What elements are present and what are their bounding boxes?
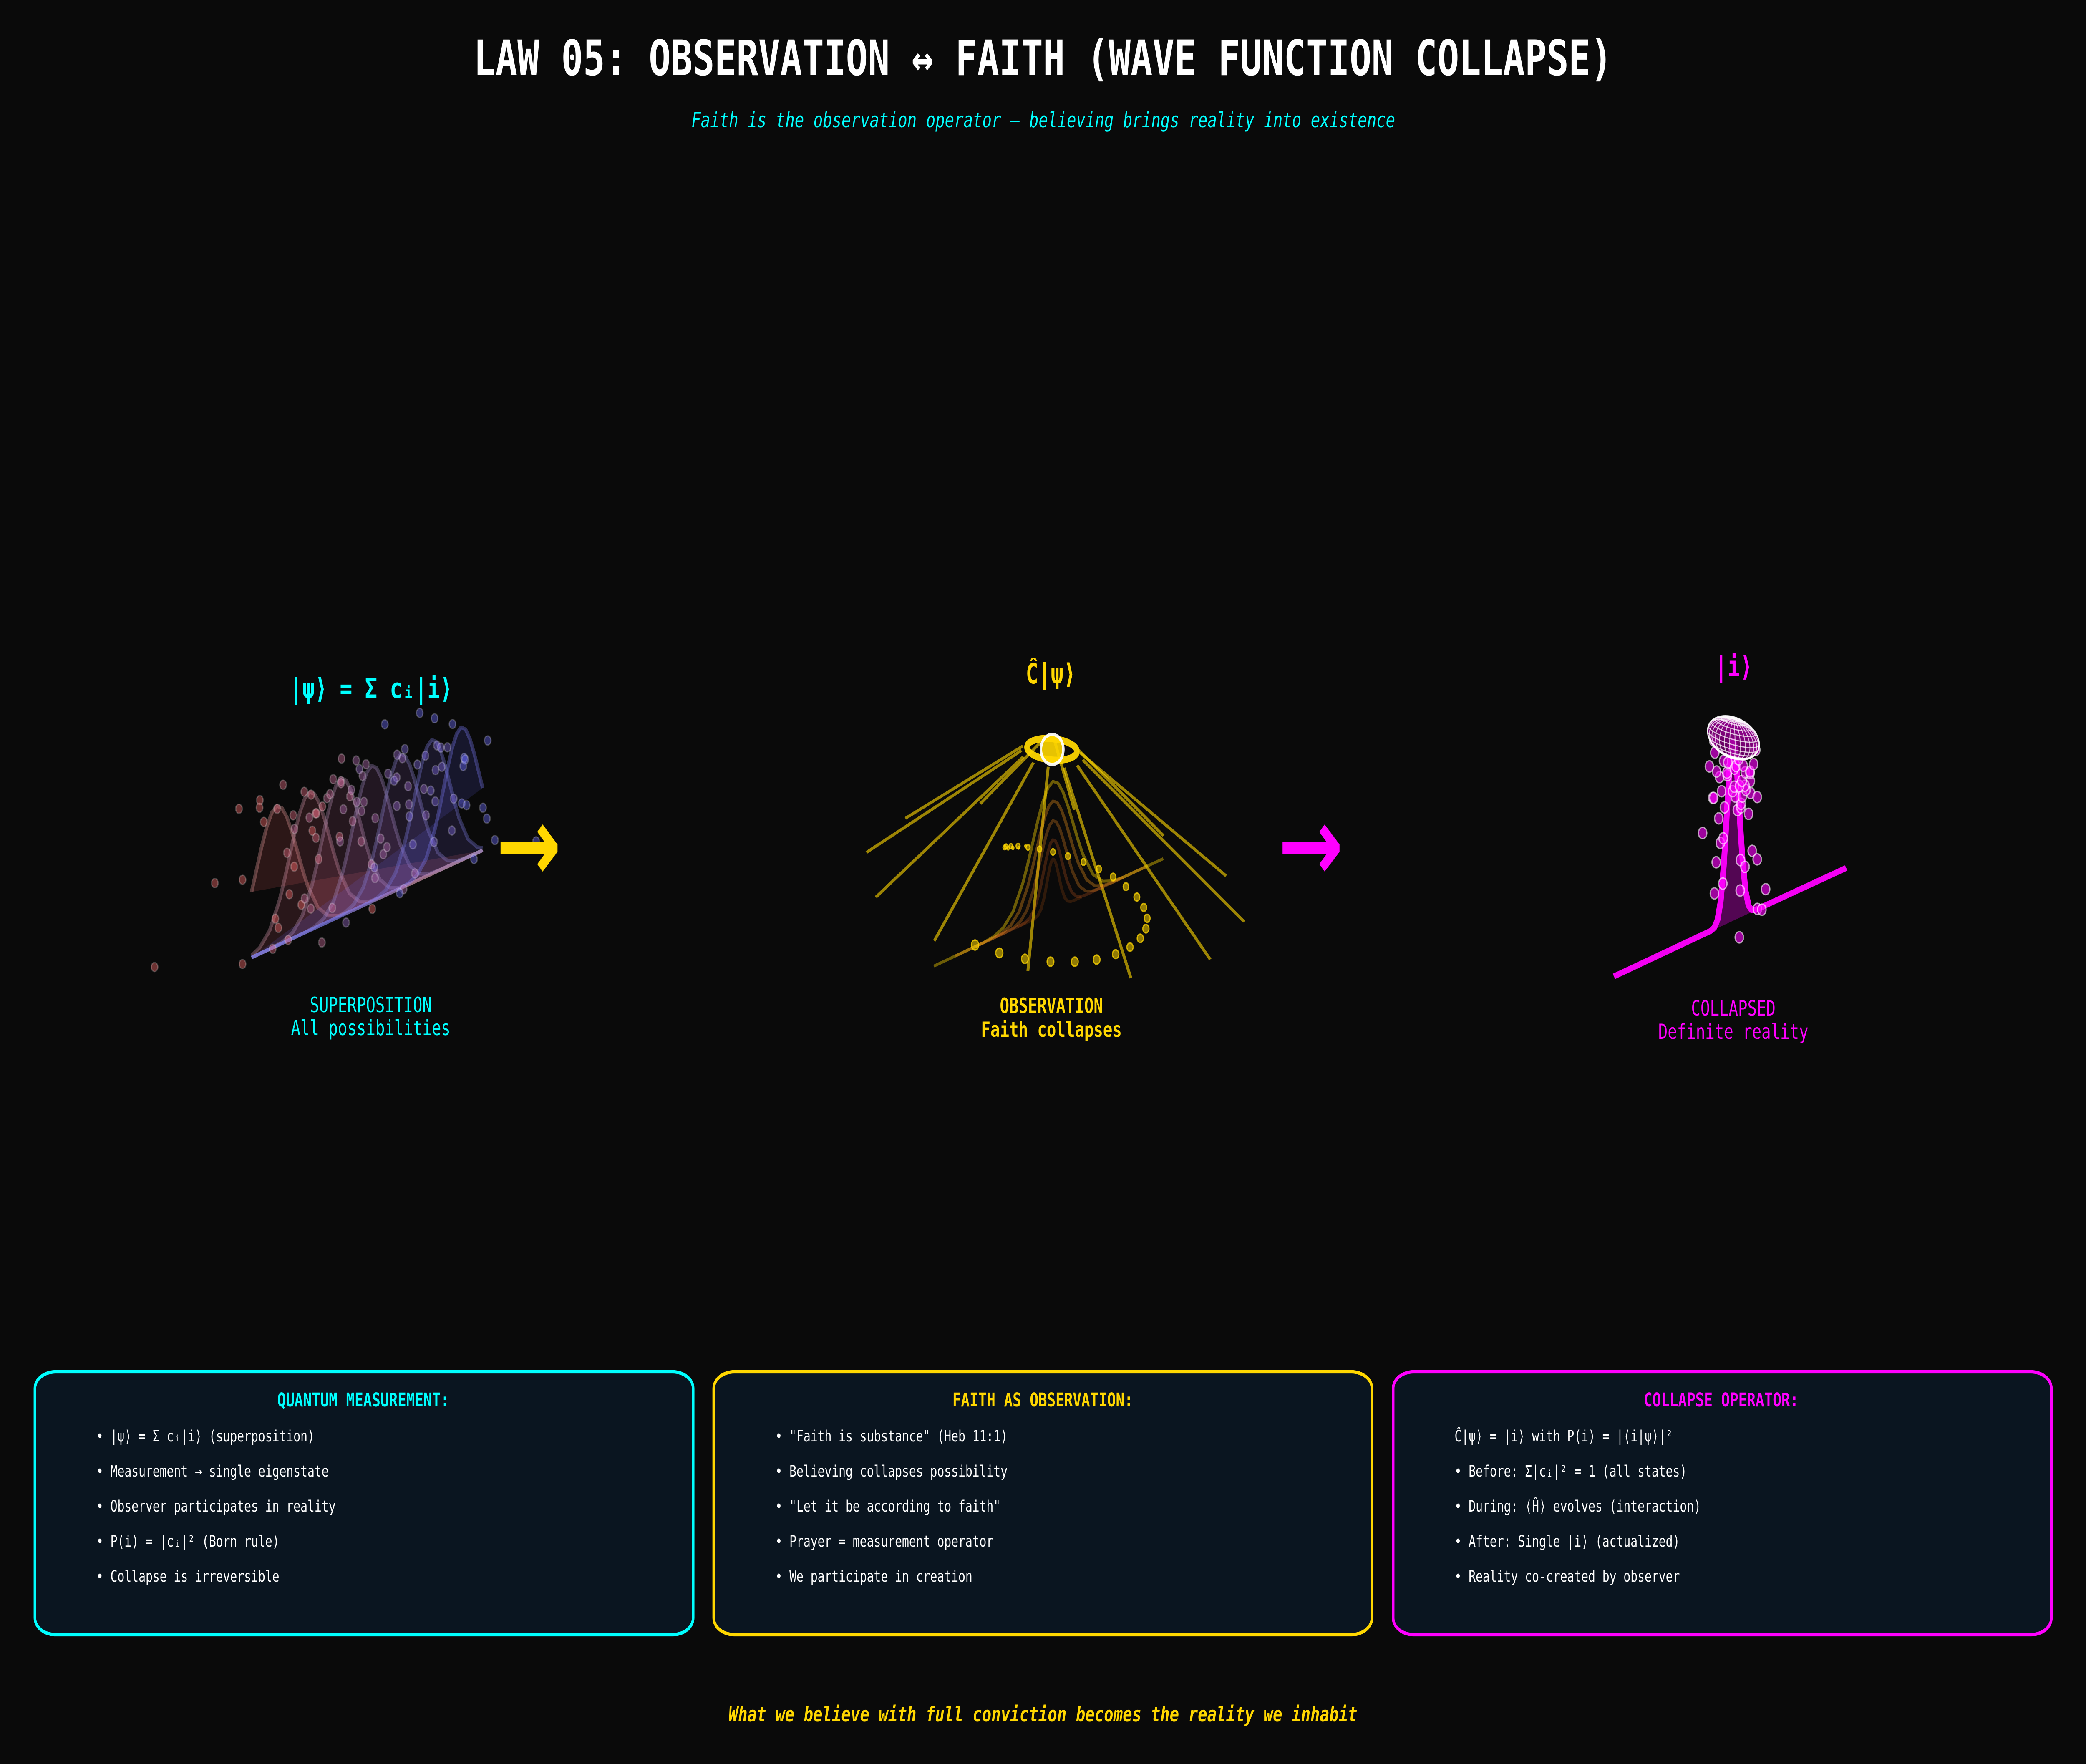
panel: collapse operator xyxy=(1393,1372,2051,1635)
text block: faith bullets: • "Let it be according to faith" xyxy=(775,1497,1000,1515)
text block: quantum measurement bullets: • Observer participates in reality xyxy=(96,1497,335,1515)
text block: collapse bullets: • During: ⟨Ĥ⟩ evolves (interaction) xyxy=(1455,1497,1701,1515)
scatter: collapsed particles xyxy=(1698,735,1770,943)
subtitle: Faith is the observation operator — believing brings reality into existence xyxy=(691,108,1395,132)
arrow: observation to collapsed xyxy=(1282,824,1340,872)
panel: collapsed stage xyxy=(1614,650,1846,1044)
chart: single collapsed peak xyxy=(1614,688,1846,976)
spiral of collapsing particles xyxy=(971,844,1150,966)
panel: observation stage xyxy=(867,658,1244,1042)
title: LAW 05: OBSERVATION ↔ FAITH (WAVE FUNCTION COLLAPSE) xyxy=(474,30,1612,87)
heading: quantum measurement: QUANTUM MEASUREMENT: xyxy=(277,1389,449,1411)
text block: collapse bullets: • Reality co-created by observer xyxy=(1455,1567,1680,1585)
formula: superposition: |ψ⟩ = Σ cᵢ|i⟩ xyxy=(290,672,452,705)
text block: faith bullets: • Believing collapses possibility xyxy=(775,1462,1008,1480)
icon: observer sphere xyxy=(1041,734,1063,764)
text block: faith bullets: • "Faith is substance" (Heb 11:1) xyxy=(775,1427,1008,1445)
caption: collapsed xyxy=(1658,997,1809,1044)
text block: collapse bullets: Ĉ|ψ⟩ = |i⟩ with P(i) = |⟨i|ψ⟩|² xyxy=(1455,1426,1673,1445)
arrow: superposition to observation xyxy=(501,824,557,872)
caption: collapsed: Definite reality xyxy=(1658,1020,1809,1044)
chart: overlapping gaussian wave curves xyxy=(252,711,483,958)
panel: quantum measurement xyxy=(35,1372,693,1635)
text block: quantum measurement bullets: • Collapse is irreversible xyxy=(96,1567,280,1585)
heading: collapse operator: COLLAPSE OPERATOR: xyxy=(1644,1389,1799,1411)
panel: faith as observation xyxy=(714,1372,1372,1635)
text block: quantum measurement bullets xyxy=(96,1427,335,1585)
icon: wireframe ellipsoid xyxy=(1703,708,1763,767)
text block: quantum measurement bullets: • |ψ⟩ = Σ cᵢ|i⟩ (superposition) xyxy=(96,1427,315,1445)
text block: collapse bullets: • Before: Σ|cᵢ|² = 1 (all states) xyxy=(1455,1462,1687,1480)
caption: superposition xyxy=(291,993,451,1040)
text block: collapse bullets xyxy=(1455,1426,1701,1585)
caption: observation: Faith collapses xyxy=(981,1018,1122,1042)
caption: observation: OBSERVATION xyxy=(1000,994,1103,1018)
caption: collapsed: COLLAPSED xyxy=(1691,997,1776,1021)
panel: superposition stage xyxy=(151,672,539,1040)
caption: superposition: SUPERPOSITION xyxy=(310,993,432,1017)
caption: superposition: All possibilities xyxy=(291,1016,451,1040)
icon: observer eye ring xyxy=(1026,736,1078,762)
text block: faith bullets: • Prayer = measurement operator xyxy=(775,1532,993,1550)
formula: observation operator: Ĉ|ψ⟩ xyxy=(1026,658,1076,690)
scatter: probability particles xyxy=(151,708,539,972)
heading: faith as observation: FAITH AS OBSERVATION: xyxy=(952,1389,1133,1411)
text block: faith bullets: • We participate in creation xyxy=(775,1567,972,1585)
caption: observation xyxy=(981,994,1122,1042)
chart: narrowing gaussian curves xyxy=(934,730,1163,966)
text block: faith bullets xyxy=(775,1427,1008,1585)
footer tagline: What we believe with full conviction becomes the reality we inhabit xyxy=(729,1703,1357,1726)
rays from the observer xyxy=(867,742,1244,978)
text block: collapse bullets: • After: Single |i⟩ (actualized) xyxy=(1455,1532,1680,1550)
formula: collapsed state: |i⟩ xyxy=(1715,650,1752,683)
text block: quantum measurement bullets: • P(i) = |cᵢ|² (Born rule) xyxy=(96,1532,280,1550)
text block: quantum measurement bullets: • Measurement → single eigenstate xyxy=(96,1462,329,1480)
